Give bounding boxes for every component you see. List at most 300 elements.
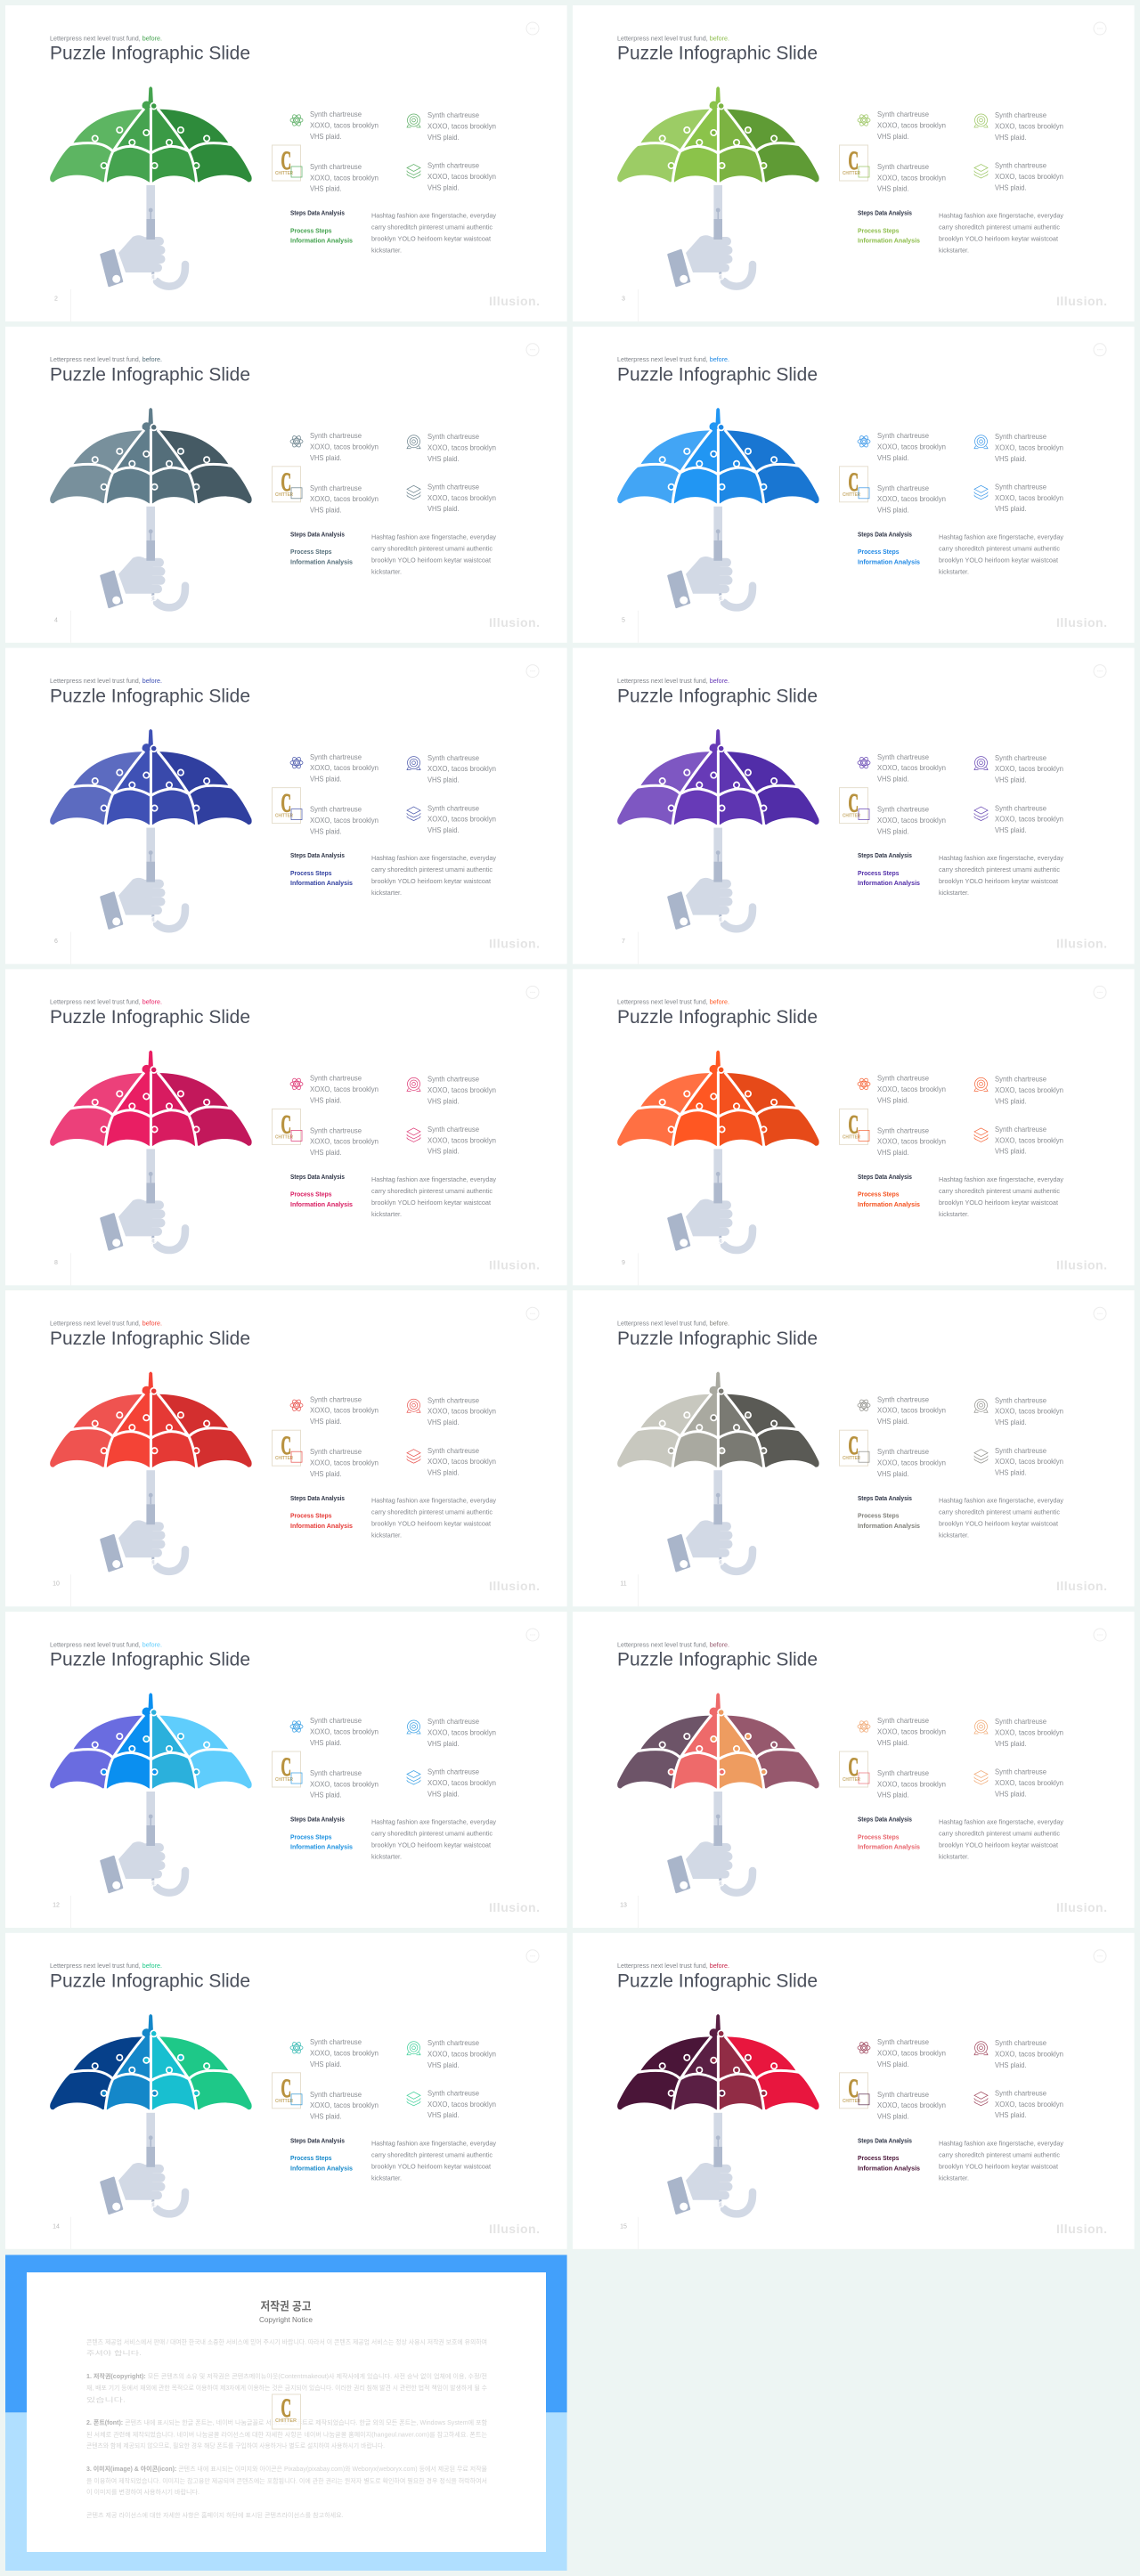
panel: slide 8 <box>5 969 567 1285</box>
page number: 12 <box>53 1902 60 1909</box>
paragraph: Hashtag fashion axe fingerstache, everyday <box>371 532 496 540</box>
icon: more menu <box>1094 665 1106 678</box>
feature text 1: VHS plaid. <box>310 2060 342 2068</box>
panel: slide 6 <box>5 648 567 964</box>
feature text 4 <box>428 483 496 513</box>
feature text 1: Synth chartreuse <box>310 753 362 761</box>
icon: more menu <box>526 986 539 998</box>
paragraph: kickstarter. <box>939 1210 969 1218</box>
paragraph: carry shoreditch pinterest umami authentic <box>371 544 493 552</box>
image badge <box>273 788 302 824</box>
feature text 4 <box>995 483 1063 513</box>
feature text 3 <box>310 1769 379 1800</box>
feature text 4: Synth chartreuse <box>995 483 1046 491</box>
icon: target <box>407 1399 420 1412</box>
feature text 4: XOXO, tacos brooklyn <box>995 1458 1063 1466</box>
steps labels <box>290 851 353 887</box>
notice: image and icon: 3. 이미지(image) & 아이콘(icon): 콘텐츠 내에 표시되는 이미지와 아이콘은 Pixabay(pixabay.com)와 Weboryx(weboryx.com) 등에서 제공된 무료 저작물 <box>86 2465 488 2473</box>
feature text 1 <box>877 2038 946 2068</box>
subtitle: Letterpress next level trust fund, before. <box>50 1319 162 1327</box>
feature text 1: VHS plaid. <box>877 1739 908 1747</box>
subtitle: Letterpress next level trust fund, before. <box>50 677 162 685</box>
steps labels <box>858 209 920 245</box>
image badge <box>273 1430 302 1466</box>
steps labels: Steps Data Analysis <box>290 530 345 538</box>
feature text 3: XOXO, tacos brooklyn <box>310 1780 379 1788</box>
steps labels: Information Analysis <box>290 1522 353 1530</box>
title: Puzzle Infographic Slide <box>50 44 250 64</box>
feature text 4: Synth chartreuse <box>995 804 1046 812</box>
notice: font: 2. 폰트(font): 콘텐츠 내에 표시되는 한글 폰트는, 네이버 나눔글꼴로 서비스되는 폰트로 제작되었습니다. 한글 외의 모든 폰트는, Windows System에 포함 <box>86 2418 488 2426</box>
paragraph <box>939 2139 1063 2182</box>
panel: slide 10 <box>5 1290 567 1606</box>
notice: font: 된 서체로 관련해 제작되었습니다. 네이버 나눔글꼴 라이선스에 대한 자세한 사항은 네이버 나눔글꼴 홈페이지(hangeul.naver.com)를 참고하세요. 폰트는 <box>86 2431 488 2438</box>
feature text 1: VHS plaid. <box>310 454 342 462</box>
steps labels: Process Steps <box>290 226 331 234</box>
feature text 2: XOXO, tacos brooklyn <box>995 1729 1063 1736</box>
paragraph: brooklyn YOLO heirloom keytar waistcoat <box>939 1520 1059 1528</box>
feature text 2: XOXO, tacos brooklyn <box>995 765 1063 773</box>
image badge <box>273 1109 302 1144</box>
feature text 1: Synth chartreuse <box>877 753 929 761</box>
icon: layers <box>407 1450 420 1463</box>
feature text 1: XOXO, tacos brooklyn <box>877 443 946 451</box>
image badge <box>273 2393 301 2429</box>
feature text 4: Synth chartreuse <box>428 804 479 812</box>
paragraph: kickstarter. <box>939 2174 969 2182</box>
icon: layers <box>407 1770 420 1784</box>
umbrella puzzle graphic <box>617 1693 819 1893</box>
feature text 3 <box>877 163 946 193</box>
steps labels <box>858 530 920 565</box>
feature text 2: VHS plaid. <box>428 1418 460 1426</box>
feature text 3: VHS plaid. <box>310 185 342 193</box>
feature text 2 <box>428 111 496 142</box>
steps labels: Steps Data Analysis <box>858 1816 912 1824</box>
icon: more menu <box>1094 344 1106 356</box>
paragraph: carry shoreditch pinterest umami authentic <box>371 1508 493 1516</box>
feature text 4: XOXO, tacos brooklyn <box>428 494 496 502</box>
paragraph: kickstarter. <box>371 889 402 897</box>
umbrella puzzle graphic <box>617 1371 819 1572</box>
feature text 3: Synth chartreuse <box>877 484 929 492</box>
feature text 3: VHS plaid. <box>877 185 908 193</box>
subtitle: Letterpress next level trust fund, before. <box>617 1640 729 1648</box>
feature text 2: XOXO, tacos brooklyn <box>995 1086 1063 1094</box>
feature text 3: Synth chartreuse <box>310 484 362 492</box>
icon: atom <box>858 1399 870 1412</box>
steps labels: Information Analysis <box>858 2164 920 2172</box>
title: Puzzle Infographic Slide <box>50 1971 250 1992</box>
paragraph: kickstarter. <box>371 1532 402 1540</box>
feature text 4: VHS plaid. <box>995 2111 1026 2119</box>
paragraph: kickstarter. <box>371 1210 402 1218</box>
paragraph <box>371 1175 496 1218</box>
paragraph: Hashtag fashion axe fingerstache, everyday <box>939 1497 1063 1505</box>
page number: 13 <box>620 1902 627 1909</box>
feature text 2 <box>995 433 1063 463</box>
image badge: CHITTER <box>843 1134 860 1140</box>
feature text 1: XOXO, tacos brooklyn <box>877 121 946 130</box>
title: Puzzle Infographic Slide <box>50 364 250 385</box>
paragraph <box>371 1497 496 1540</box>
feature text 3: XOXO, tacos brooklyn <box>877 495 946 503</box>
feature text 4: XOXO, tacos brooklyn <box>995 1779 1063 1787</box>
image badge: C <box>848 789 859 818</box>
page number: 6 <box>54 939 58 945</box>
paragraph: carry shoreditch pinterest umami authentic <box>371 1187 493 1195</box>
icon: target <box>974 2042 988 2055</box>
paragraph: brooklyn YOLO heirloom keytar waistcoat <box>371 1520 492 1528</box>
feature text 4 <box>428 804 496 834</box>
feature text 4: VHS plaid. <box>428 505 460 513</box>
feature text 1: XOXO, tacos brooklyn <box>310 2049 379 2057</box>
paragraph: carry shoreditch pinterest umami authentic <box>939 1508 1060 1516</box>
page number: 15 <box>620 2223 627 2230</box>
paragraph: brooklyn YOLO heirloom keytar waistcoat <box>371 556 492 564</box>
notice: image and icon <box>86 2465 488 2496</box>
feature text 2 <box>428 1718 496 1748</box>
notice: font <box>86 2418 488 2450</box>
feature text 3: Synth chartreuse <box>877 1769 929 1777</box>
notice: copyright: 재, 배포 기기 등에서 재외에 관한 목적으로 이용하여 제3자에게 이용하는 것은 금지되어 있습니다. 이러한 권리 침해 발견 시 관련한 법적 책임이 발생하게 될 수 <box>86 2384 488 2392</box>
feature text 1: Synth chartreuse <box>877 1717 929 1725</box>
feature text 1 <box>877 753 946 784</box>
feature text 1 <box>310 2038 379 2068</box>
feature text 1: Synth chartreuse <box>310 2038 362 2046</box>
feature text 1 <box>310 1395 379 1426</box>
paragraph: brooklyn YOLO heirloom keytar waistcoat <box>371 235 492 242</box>
icon: atom <box>858 1077 870 1091</box>
image badge <box>273 145 302 181</box>
feature text 2: Synth chartreuse <box>995 2039 1046 2047</box>
feature text 4 <box>995 2089 1063 2119</box>
feature text 1: XOXO, tacos brooklyn <box>877 2049 946 2057</box>
feature text 4: Synth chartreuse <box>428 1768 479 1776</box>
paragraph <box>939 854 1063 897</box>
feature text 4: XOXO, tacos brooklyn <box>995 173 1063 181</box>
subtitle: Letterpress next level trust fund, before. <box>617 1319 729 1327</box>
steps labels <box>290 1494 353 1530</box>
page number: 4 <box>54 617 58 623</box>
feature text 3 <box>310 484 379 515</box>
icon: atom <box>858 1719 870 1734</box>
icon: atom <box>858 113 870 127</box>
steps labels: Process Steps <box>290 548 331 556</box>
paragraph: brooklyn YOLO heirloom keytar waistcoat <box>939 1841 1059 1849</box>
feature text 3: Synth chartreuse <box>877 1448 929 1456</box>
feature text 2 <box>428 1076 496 1105</box>
paragraph: Hashtag fashion axe fingerstache, everyday <box>939 1818 1063 1825</box>
brand: Illusion. <box>489 937 540 951</box>
paragraph <box>371 532 496 575</box>
feature text 4: XOXO, tacos brooklyn <box>428 1458 496 1466</box>
feature text 3: XOXO, tacos brooklyn <box>877 1138 946 1146</box>
feature text 1 <box>877 1717 946 1747</box>
paragraph: Hashtag fashion axe fingerstache, everyday <box>371 854 496 862</box>
paragraph: kickstarter. <box>939 1852 969 1861</box>
feature text 4: XOXO, tacos brooklyn <box>428 1136 496 1144</box>
steps labels: Process Steps <box>290 1832 331 1841</box>
image badge: CHITTER <box>275 171 293 176</box>
panel: slide 11 <box>573 1290 1135 1606</box>
feature text 1: XOXO, tacos brooklyn <box>310 443 379 451</box>
title: Puzzle Infographic Slide <box>617 1329 818 1349</box>
image badge: C <box>848 1431 859 1460</box>
panel: copyright notice <box>5 2255 567 2571</box>
feature text 2: Synth chartreuse <box>995 754 1046 762</box>
page number: 7 <box>622 939 625 945</box>
icon: target <box>974 1720 988 1734</box>
feature text 3: XOXO, tacos brooklyn <box>877 1459 946 1467</box>
feature text 4: XOXO, tacos brooklyn <box>995 494 1063 502</box>
image badge: C <box>281 2074 291 2103</box>
steps labels: Steps Data Analysis <box>858 851 912 859</box>
feature text 2: XOXO, tacos brooklyn <box>428 123 496 130</box>
brand: Illusion. <box>1056 1257 1107 1272</box>
icon: target <box>407 1077 420 1091</box>
feature text 4: XOXO, tacos brooklyn <box>428 816 496 824</box>
brand: Illusion. <box>1056 2222 1107 2236</box>
feature text 4: VHS plaid. <box>428 2111 460 2119</box>
icon: layers <box>974 485 988 500</box>
icon: target <box>974 1399 988 1412</box>
feature text 2: Synth chartreuse <box>428 433 479 441</box>
feature text 3: VHS plaid. <box>310 1149 342 1157</box>
feature text 1: XOXO, tacos brooklyn <box>877 1085 946 1093</box>
feature text 3: Synth chartreuse <box>310 2091 362 2099</box>
feature text 2: XOXO, tacos brooklyn <box>995 123 1063 130</box>
steps labels: Steps Data Analysis <box>858 1173 912 1181</box>
subtitle: Letterpress next level trust fund, before. <box>50 998 162 1006</box>
feature text 3: VHS plaid. <box>310 827 342 835</box>
icon: atom <box>290 1399 303 1412</box>
umbrella puzzle graphic <box>50 408 252 607</box>
feature text 2: Synth chartreuse <box>995 1076 1046 1084</box>
feature text 4: Synth chartreuse <box>995 162 1046 170</box>
feature text 2: VHS plaid. <box>428 134 460 142</box>
icon: layers <box>974 164 988 178</box>
paragraph: Hashtag fashion axe fingerstache, everyday <box>939 2139 1063 2147</box>
feature text 2: Synth chartreuse <box>428 754 479 762</box>
feature text 3: XOXO, tacos brooklyn <box>877 174 946 182</box>
image badge: C <box>848 467 859 497</box>
icon: atom <box>858 756 870 769</box>
feature text 4 <box>995 162 1063 191</box>
page number: 5 <box>622 617 625 623</box>
paragraph: brooklyn YOLO heirloom keytar waistcoat <box>939 235 1059 242</box>
paragraph <box>371 1818 496 1861</box>
feature text 2 <box>995 1718 1063 1748</box>
steps labels: Information Analysis <box>858 1522 920 1530</box>
icon: target <box>407 435 420 449</box>
feature text 1: XOXO, tacos brooklyn <box>310 1085 379 1093</box>
title: Puzzle Infographic Slide <box>50 1007 250 1028</box>
feature text 2: Synth chartreuse <box>995 1718 1046 1726</box>
feature text 2: VHS plaid. <box>995 776 1026 784</box>
feature text 2: VHS plaid. <box>995 455 1026 463</box>
subtitle: Letterpress next level trust fund, before. <box>617 355 729 363</box>
steps labels: Process Steps <box>290 2154 331 2162</box>
image badge: C <box>281 146 291 175</box>
feature text 1: VHS plaid. <box>310 133 342 141</box>
feature text 1: VHS plaid. <box>310 1739 342 1747</box>
feature text 1: Synth chartreuse <box>877 110 929 118</box>
image badge: CHITTER <box>843 1456 860 1461</box>
icon: atom <box>290 435 303 448</box>
feature text 1 <box>310 110 379 141</box>
notice: image and icon: 이 이미지를 변경하여 사용하시기 바랍니다. <box>86 2488 200 2496</box>
feature text 4: XOXO, tacos brooklyn <box>995 1136 1063 1144</box>
brand: Illusion. <box>489 1257 540 1272</box>
icon: atom <box>290 2041 303 2054</box>
feature text 3: XOXO, tacos brooklyn <box>310 174 379 182</box>
feature text 1: XOXO, tacos brooklyn <box>310 121 379 130</box>
umbrella puzzle graphic <box>50 1371 252 1572</box>
icon: atom <box>290 1077 303 1091</box>
icon: atom <box>290 756 303 769</box>
feature text 1 <box>877 432 946 462</box>
feature text 3 <box>310 1448 379 1478</box>
feature text 4: Synth chartreuse <box>995 2090 1046 2098</box>
icon: target <box>974 1077 988 1091</box>
feature text 3: VHS plaid. <box>877 1792 908 1800</box>
icon: target <box>974 757 988 770</box>
title: Puzzle Infographic Slide <box>50 1329 250 1349</box>
feature text 2: Synth chartreuse <box>428 1396 479 1404</box>
paragraph: brooklyn YOLO heirloom keytar waistcoat <box>371 1199 492 1207</box>
brand: Illusion. <box>1056 937 1107 951</box>
paragraph: Hashtag fashion axe fingerstache, everyday <box>939 212 1063 219</box>
icon: layers <box>407 2092 420 2106</box>
brand: Illusion. <box>1056 615 1107 630</box>
feature text 1: Synth chartreuse <box>877 432 929 440</box>
umbrella puzzle graphic <box>50 86 252 287</box>
steps labels: Process Steps <box>858 1832 900 1841</box>
feature text 3: VHS plaid. <box>310 2113 342 2121</box>
feature text 3: VHS plaid. <box>877 1470 908 1478</box>
feature text 2: XOXO, tacos brooklyn <box>428 765 496 773</box>
feature text 1 <box>877 1075 946 1104</box>
feature text 2: VHS plaid. <box>995 134 1026 142</box>
paragraph: brooklyn YOLO heirloom keytar waistcoat <box>939 877 1059 885</box>
image badge: CHITTER <box>275 814 293 819</box>
feature text 1 <box>877 1395 946 1426</box>
feature text 3: XOXO, tacos brooklyn <box>310 495 379 503</box>
image badge <box>839 467 869 502</box>
steps labels: Process Steps <box>290 1511 331 1519</box>
steps labels: Steps Data Analysis <box>290 851 345 859</box>
notice intro: 주셔야 합니다. <box>86 2349 142 2357</box>
feature text 4: VHS plaid. <box>995 1790 1026 1798</box>
steps labels: Steps Data Analysis <box>290 2136 345 2144</box>
feature text 3: Synth chartreuse <box>877 2091 929 2099</box>
paragraph <box>939 532 1063 575</box>
steps labels <box>290 1173 353 1208</box>
steps labels <box>290 530 353 565</box>
feature text 4: VHS plaid. <box>995 183 1026 191</box>
feature text 3 <box>877 806 946 835</box>
image badge: CHITTER <box>843 1777 860 1783</box>
image badge <box>839 1430 869 1466</box>
steps labels <box>858 1816 920 1851</box>
icon: more menu <box>1094 1629 1106 1641</box>
feature text 4: Synth chartreuse <box>995 1125 1046 1134</box>
notice intro: 콘텐츠 제공업 서비스에서 판매 / 대여한 한국내 소중한 서비스에 믿어 주시기 바랍니다. 따라서 이 콘텐츠 제공업 서비스는 정상 사용시 저작권 보호에 유의하여 <box>86 2338 487 2345</box>
feature text 4: XOXO, tacos brooklyn <box>428 2101 496 2109</box>
feature text 4: Synth chartreuse <box>428 2090 479 2098</box>
feature text 3: Synth chartreuse <box>310 1126 362 1134</box>
panel: slide 5 <box>573 327 1135 643</box>
steps labels <box>290 209 353 245</box>
feature text 2 <box>995 2039 1063 2069</box>
paragraph: carry shoreditch pinterest umami authentic <box>371 223 493 232</box>
umbrella puzzle graphic <box>617 408 819 607</box>
icon: layers <box>974 807 988 821</box>
steps labels: Steps Data Analysis <box>290 1816 345 1824</box>
copyright heading: 저작권 공고 <box>260 2299 312 2313</box>
image badge <box>839 1751 869 1787</box>
feature text 1: Synth chartreuse <box>310 1075 362 1083</box>
feature text 2: Synth chartreuse <box>995 111 1046 119</box>
feature text 2: VHS plaid. <box>995 1740 1026 1748</box>
feature text 2 <box>995 111 1063 142</box>
subtitle: Letterpress next level trust fund, before. <box>617 998 729 1006</box>
paragraph: carry shoreditch pinterest umami authentic <box>939 1187 1060 1195</box>
image badge <box>839 145 869 181</box>
image badge <box>273 1751 302 1787</box>
brand: Illusion. <box>489 2222 540 2236</box>
feature text 1: VHS plaid. <box>310 1096 342 1104</box>
feature text 3 <box>877 1769 946 1800</box>
icon: layers <box>407 164 420 178</box>
feature text 4: VHS plaid. <box>428 826 460 834</box>
paragraph: Hashtag fashion axe fingerstache, everyday <box>939 1175 1063 1183</box>
title: Puzzle Infographic Slide <box>617 1971 818 1992</box>
feature text 1 <box>877 110 946 141</box>
notice intro <box>86 2338 487 2357</box>
panel: slide 12 <box>5 1612 567 1928</box>
subtitle: Letterpress next level trust fund, before. <box>50 1962 162 1970</box>
feature text 2: Synth chartreuse <box>428 111 479 119</box>
paragraph: kickstarter. <box>371 1852 402 1861</box>
paragraph: Hashtag fashion axe fingerstache, everyday <box>939 854 1063 862</box>
paragraph: carry shoreditch pinterest umami authentic <box>939 865 1060 874</box>
feature text 4 <box>428 1125 496 1156</box>
feature text 2: VHS plaid. <box>428 1740 460 1748</box>
feature text 1: VHS plaid. <box>877 1418 908 1426</box>
paragraph: kickstarter. <box>939 567 969 575</box>
umbrella puzzle graphic <box>617 2014 819 2214</box>
paragraph: kickstarter. <box>939 889 969 897</box>
image badge: CHITTER <box>275 2099 293 2104</box>
feature text 1: Synth chartreuse <box>877 1395 929 1403</box>
feature text 3: Synth chartreuse <box>877 806 929 814</box>
image badge: CHITTER <box>275 2418 297 2424</box>
feature text 4 <box>995 1125 1063 1156</box>
steps labels <box>858 851 920 887</box>
feature text 3 <box>310 163 379 193</box>
feature text 2: XOXO, tacos brooklyn <box>995 2050 1063 2058</box>
title: Puzzle Infographic Slide <box>617 44 818 64</box>
paragraph: carry shoreditch pinterest umami authentic <box>939 544 1060 552</box>
steps labels: Steps Data Analysis <box>290 209 345 217</box>
brand: Illusion. <box>1056 294 1107 308</box>
steps labels: Process Steps <box>858 2154 900 2162</box>
icon: more menu <box>526 665 539 678</box>
notice: copyright <box>86 2372 488 2404</box>
paragraph <box>371 212 496 255</box>
